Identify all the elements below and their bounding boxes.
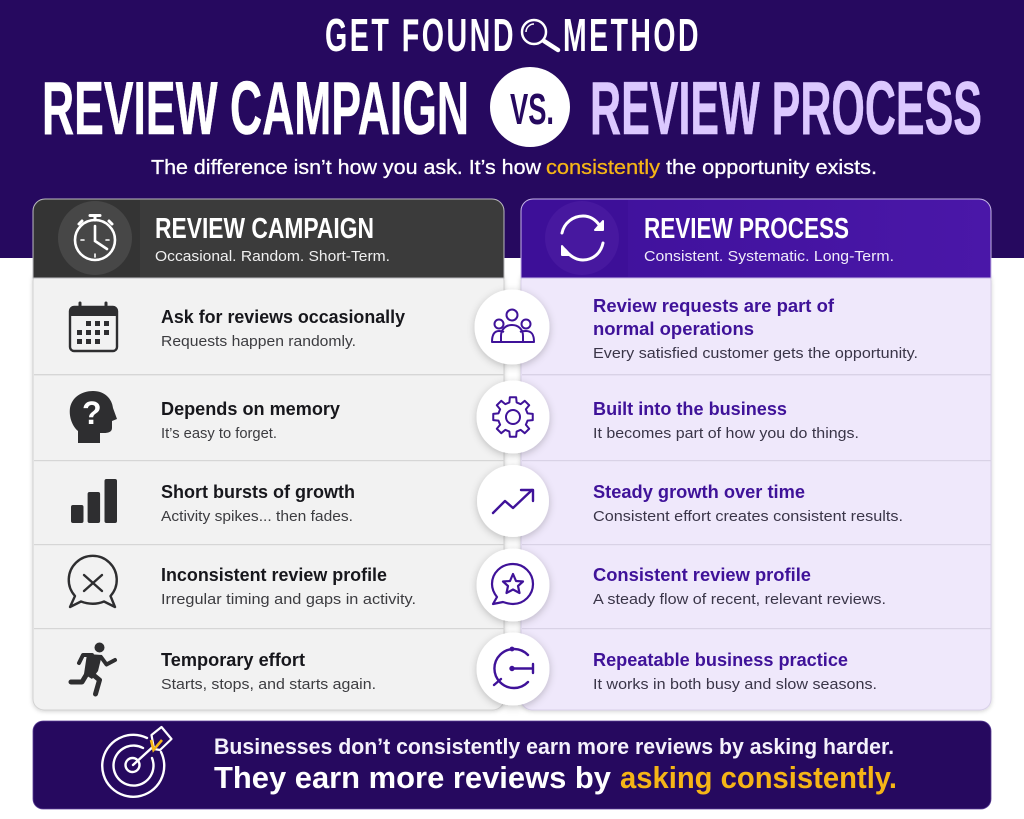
row: temporary effort — [71, 642, 376, 694]
row: depends on memory: Depends on memory — [161, 399, 340, 419]
row: consistent profile: Consistent review profile — [593, 565, 811, 585]
icon: sync arrows — [562, 216, 603, 260]
brand title: Get Found Method: GET FOUND — [325, 9, 516, 61]
header background — [0, 0, 1024, 258]
left panel header — [33, 199, 504, 278]
left panel body — [33, 270, 504, 710]
row: temporary effort: Temporary effort — [161, 650, 305, 670]
row: built into business — [593, 399, 859, 442]
heading: Review Campaign: REVIEW CAMPAIGN — [42, 66, 469, 150]
icon: bar chart — [71, 479, 117, 523]
icon: cycle with arrow — [476, 632, 550, 706]
panel: review campaign — [33, 199, 504, 710]
center connector icons — [474, 290, 550, 706]
row: temporary effort: Starts, stops, and starts again. — [161, 677, 376, 693]
row: short bursts: Activity spikes... then fades. — [161, 509, 353, 525]
row: inconsistent profile — [69, 556, 416, 608]
brand title: Get Found Method: METHOD — [563, 9, 701, 61]
row: review requests: Review requests are part of — [593, 296, 835, 316]
row: steady growth — [593, 482, 903, 525]
subtitle: the opportunity exists. — [666, 157, 877, 179]
right panel body — [521, 270, 991, 710]
vs badge: VS. — [510, 85, 554, 134]
icon: gear — [476, 380, 550, 454]
icon: calendar — [70, 303, 117, 351]
row: depends on memory — [70, 391, 340, 443]
icon: stopwatch — [75, 216, 115, 260]
row: short bursts: Short bursts of growth — [161, 482, 355, 502]
panel: review process — [521, 199, 991, 710]
icon: head with question mark: ? — [82, 395, 102, 431]
row: consistent profile — [593, 565, 886, 608]
row: built into business: Built into the business — [593, 399, 787, 419]
icon: people — [474, 290, 550, 364]
subtitle: The difference isn’t how you ask. It’s how — [151, 157, 542, 179]
right panel header: Consistent. Systematic. Long-Term. — [644, 248, 894, 265]
row: consistent profile: A steady flow of recent, relevant reviews. — [593, 592, 886, 608]
icon: speech bubble with x — [69, 556, 117, 607]
icon: head with question mark — [70, 391, 117, 443]
icon: target with arrow — [102, 727, 172, 797]
row: depends on memory: It’s easy to forget. — [161, 426, 277, 442]
right panel header — [521, 199, 991, 278]
row: ask occasionally: Requests happen randomly. — [161, 334, 356, 350]
icon: trend arrow — [477, 465, 549, 537]
row: inconsistent profile: Inconsistent review profile — [161, 565, 387, 585]
row: ask occasionally — [70, 303, 405, 351]
left panel header: REVIEW CAMPAIGN — [155, 213, 374, 245]
row: repeatable practice: Repeatable business practice — [593, 650, 848, 670]
row: inconsistent profile: Irregular timing and gaps in activity. — [161, 592, 416, 608]
row: ask occasionally: Ask for reviews occasionally — [161, 307, 405, 327]
bottom banner: asking consistently. — [620, 760, 897, 795]
icon: runner — [71, 642, 115, 694]
row: repeatable practice — [593, 650, 877, 693]
row: review requests: normal operations — [593, 319, 754, 339]
row: review requests — [593, 296, 918, 362]
row: short bursts — [71, 479, 355, 525]
bottom banner — [33, 721, 991, 809]
row: built into business: It becomes part of how you do things. — [593, 426, 859, 442]
left panel header: Occasional. Random. Short-Term. — [155, 248, 390, 265]
icon: star speech bubble — [476, 548, 550, 622]
row: repeatable practice: It works in both busy and slow seasons. — [593, 677, 877, 693]
row: steady growth: Steady growth over time — [593, 482, 805, 502]
icon: magnifying glass — [522, 20, 558, 50]
right panel header: REVIEW PROCESS — [644, 213, 849, 245]
subtitle — [151, 157, 877, 179]
bottom banner: They earn more reviews by — [214, 760, 612, 795]
bottom banner: Businesses don’t consistently earn more reviews by asking harder. — [214, 734, 894, 759]
row: review requests: Every satisfied customer gets the opportunity. — [593, 346, 918, 362]
row: steady growth: Consistent effort creates consistent results. — [593, 509, 903, 525]
vs badge — [490, 67, 570, 147]
subtitle: consistently — [546, 157, 660, 179]
